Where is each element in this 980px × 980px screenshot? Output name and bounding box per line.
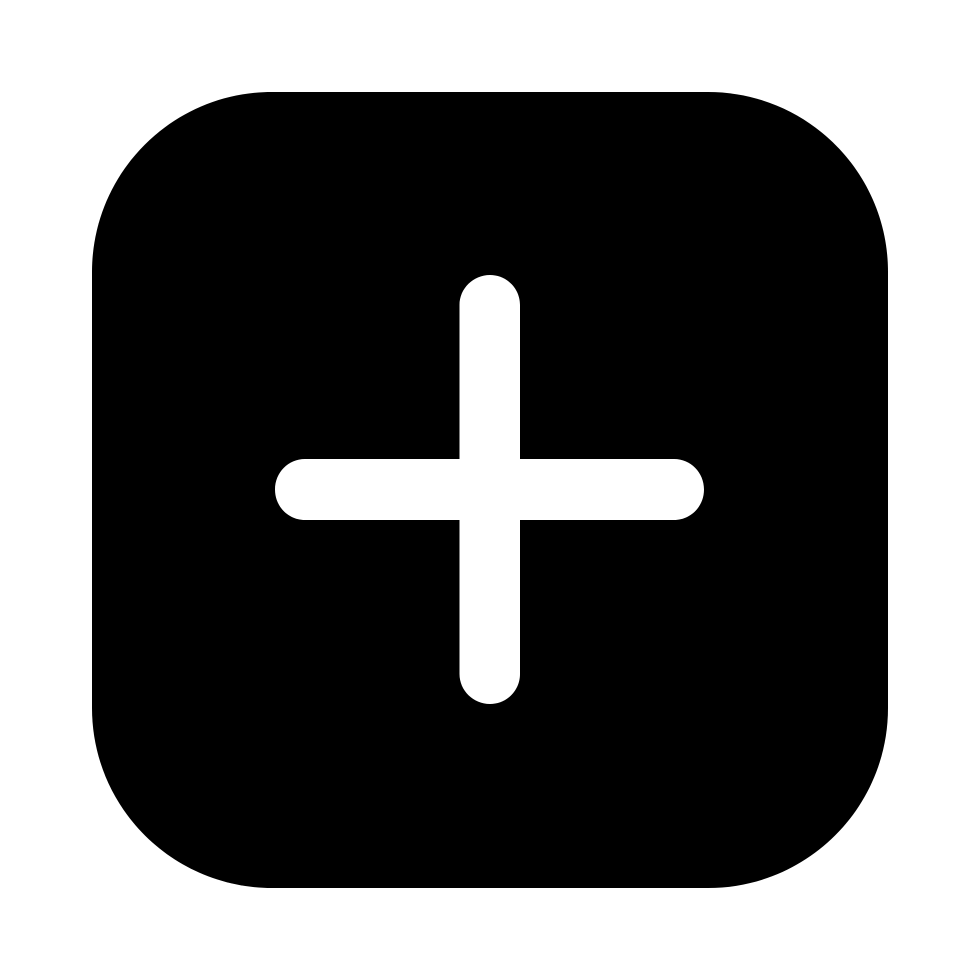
plus sign xyxy=(275,275,704,704)
icon background: black rounded square xyxy=(92,92,888,888)
